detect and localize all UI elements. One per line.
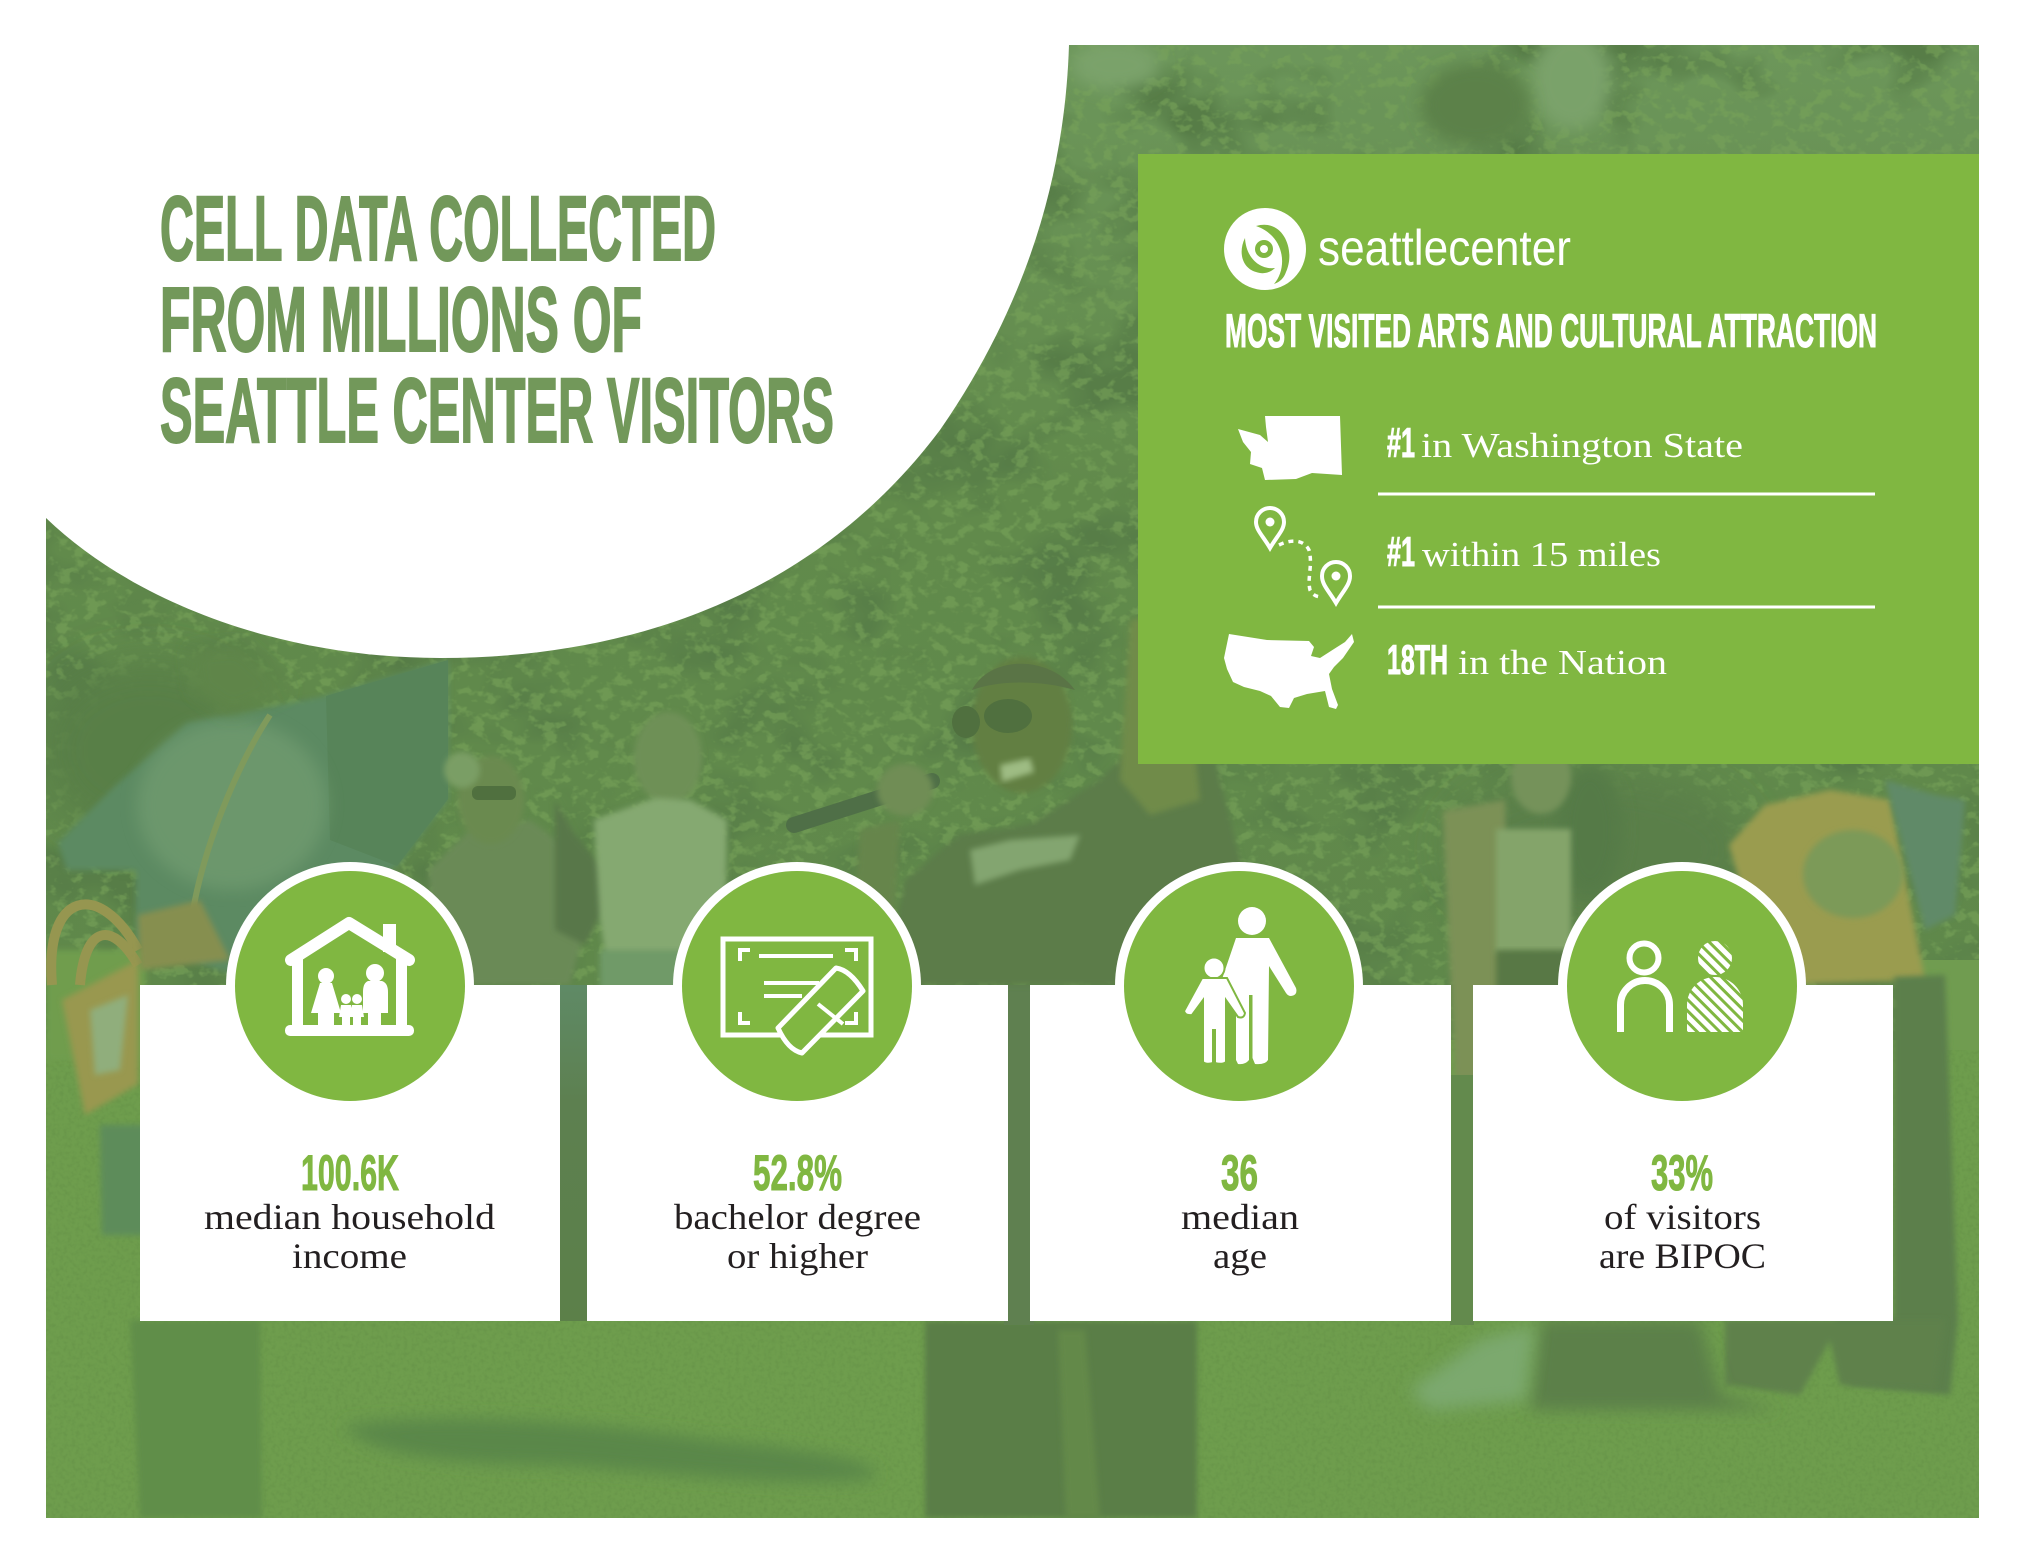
- singer: centre figure: [925, 1321, 1197, 1518]
- stat: 33%: 33%: [1651, 1145, 1713, 1201]
- label: [674, 1197, 921, 1276]
- row: #1 in Washington State: #1: [1387, 419, 1415, 466]
- label: or higher: [727, 1236, 868, 1276]
- panel: most visited attraction: [1138, 154, 1979, 764]
- label: are BIPOC: [1599, 1236, 1766, 1276]
- logo: Seattle Center: [1224, 208, 1571, 290]
- label: [1181, 1197, 1299, 1276]
- title: SEATTLE CENTER VISITORS: [160, 360, 834, 462]
- label: median: [1181, 1197, 1299, 1237]
- icon: family in house: [285, 923, 414, 1036]
- icon: map pins with dotted route: [1256, 508, 1350, 603]
- label: of visitors: [1604, 1197, 1761, 1237]
- icon: United States map: [1224, 634, 1354, 709]
- icon: diploma certificate: [723, 939, 871, 1053]
- icon: adult and child: [1184, 907, 1296, 1064]
- lawn shadow: [345, 1419, 876, 1482]
- card: median age: [1030, 862, 1451, 1321]
- card: bachelor degree or higher: [587, 862, 1008, 1321]
- left dancer's bag: [51, 715, 270, 985]
- card: visitors are BIPOC: [1473, 862, 1893, 1321]
- row: #1 within 15 miles: within 15 miles: [1422, 535, 1661, 574]
- logo: Seattle Center: seattlecenter: [1318, 220, 1571, 276]
- woman in coat: [1443, 800, 1510, 1079]
- row: #1 within 15 miles: #1: [1387, 528, 1415, 575]
- title: [160, 178, 834, 462]
- lawn: [46, 1040, 1979, 1518]
- row: 18TH in the Nation: [1387, 636, 1667, 683]
- label: age: [1213, 1236, 1267, 1276]
- row: 18TH in the Nation: in the Nation: [1458, 643, 1667, 682]
- label: bachelor degree: [674, 1197, 921, 1237]
- sky gaps: [1532, 30, 1612, 130]
- stat: 36: 36: [1221, 1145, 1258, 1201]
- label: median household: [204, 1197, 495, 1237]
- stat: 52.8%: 52.8%: [753, 1145, 842, 1201]
- stat: 100.6K: 100.6K: [301, 1145, 399, 1201]
- card: median household income: [140, 862, 560, 1321]
- icon: two people: [1620, 941, 1743, 1032]
- backpack and cloth on lawn: [1530, 1320, 1780, 1410]
- label: [1599, 1197, 1766, 1276]
- label: income: [292, 1236, 407, 1276]
- third dancer in white tank: [634, 712, 702, 804]
- row: 18TH in the Nation: 18TH: [1387, 636, 1448, 683]
- second dancer in sunglasses: [428, 820, 593, 985]
- row: #1 within 15 miles: [1387, 528, 1661, 575]
- figure at right with orange T-shirt: [1729, 790, 1925, 985]
- label: [204, 1197, 495, 1276]
- title: FROM MILLIONS OF: [160, 269, 642, 371]
- left dancer: [130, 1320, 262, 1518]
- title: CELL DATA COLLECTED: [160, 178, 716, 280]
- white curved title shape: [46, 45, 1069, 658]
- row: #1 in Washington State: [1387, 419, 1743, 466]
- icon: Washington State: [1238, 416, 1342, 480]
- row: #1 in Washington State: in Washington State: [1421, 426, 1743, 465]
